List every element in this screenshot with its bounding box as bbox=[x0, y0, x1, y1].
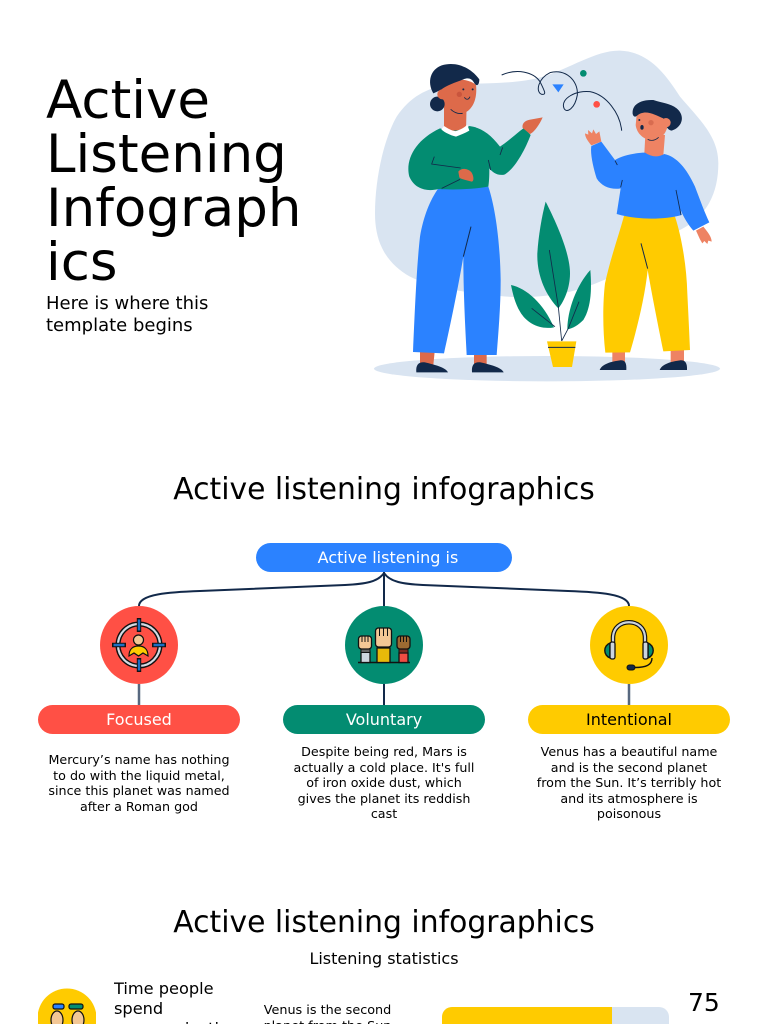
text: Intentional: poisonous bbox=[597, 806, 661, 821]
subtitle: template begins bbox=[46, 315, 193, 336]
background blob bbox=[375, 51, 718, 297]
title: ics bbox=[46, 232, 117, 293]
text: Intentional bbox=[537, 744, 721, 821]
pill: Active listening is bbox=[256, 543, 512, 572]
squiggle and dots bbox=[502, 70, 622, 131]
pill: Intentional: Intentional bbox=[586, 710, 672, 729]
stat label: spend bbox=[114, 999, 163, 1018]
stat label bbox=[114, 979, 229, 1024]
text: Voluntary: gives the planet its reddish bbox=[298, 790, 470, 806]
text: Voluntary: cast bbox=[371, 806, 397, 821]
text: Voluntary bbox=[294, 744, 474, 821]
stat text: Venus is the second bbox=[264, 1003, 391, 1018]
icon: raised fists bbox=[345, 606, 423, 684]
icon: headset bbox=[590, 606, 668, 684]
title bbox=[46, 70, 301, 293]
ground shadow bbox=[374, 356, 720, 381]
text: Focused: Mercury’s name has nothing bbox=[48, 752, 230, 767]
pill: Focused bbox=[38, 705, 240, 734]
text: Intentional: and its atmosphere is bbox=[560, 790, 698, 806]
heading: section 2: Active listening infographics bbox=[173, 472, 595, 507]
illustration: two people talking bbox=[374, 50, 720, 382]
icon: people talking bbox=[38, 988, 96, 1024]
progress bar bbox=[442, 1007, 669, 1024]
text: Voluntary: actually a cold place. It's full bbox=[294, 760, 474, 774]
text: Focused: after a Roman god bbox=[80, 798, 198, 814]
heading: section 3: Active listening infographics bbox=[173, 905, 595, 940]
pill: Active listening is: Active listening is bbox=[318, 548, 458, 567]
title: Listening bbox=[46, 124, 287, 185]
pill: Voluntary bbox=[283, 705, 485, 734]
woman right bbox=[585, 100, 712, 370]
subtitle: Here is where this bbox=[46, 293, 208, 314]
subtitle bbox=[46, 293, 208, 336]
stat value: 75 bbox=[688, 988, 720, 1017]
text: Focused: to do with the liquid metal, bbox=[53, 768, 225, 782]
text: Focused bbox=[48, 752, 230, 814]
text: Focused: since this planet was named bbox=[48, 783, 230, 798]
tree connectors bbox=[138, 572, 630, 705]
title: Infograph bbox=[46, 178, 301, 239]
title: Active bbox=[46, 70, 210, 131]
pill: Focused: Focused bbox=[106, 710, 172, 729]
pill: Intentional bbox=[528, 705, 730, 734]
stat label: Time people bbox=[114, 979, 214, 998]
text: Voluntary: of iron oxide dust, which bbox=[306, 775, 462, 790]
text: Voluntary: Despite being red, Mars is bbox=[301, 744, 467, 759]
text: Intentional: Venus has a beautiful name bbox=[541, 744, 717, 759]
icon: target person bbox=[100, 606, 178, 684]
woman left bbox=[408, 64, 543, 372]
text: Intentional: and is the second planet bbox=[551, 760, 707, 774]
pill: Voluntary: Voluntary bbox=[346, 710, 422, 729]
plant bbox=[511, 202, 591, 367]
text: Intentional: from the Sun. It’s terribly hot bbox=[537, 775, 721, 790]
subheading: Listening statistics bbox=[309, 949, 459, 968]
